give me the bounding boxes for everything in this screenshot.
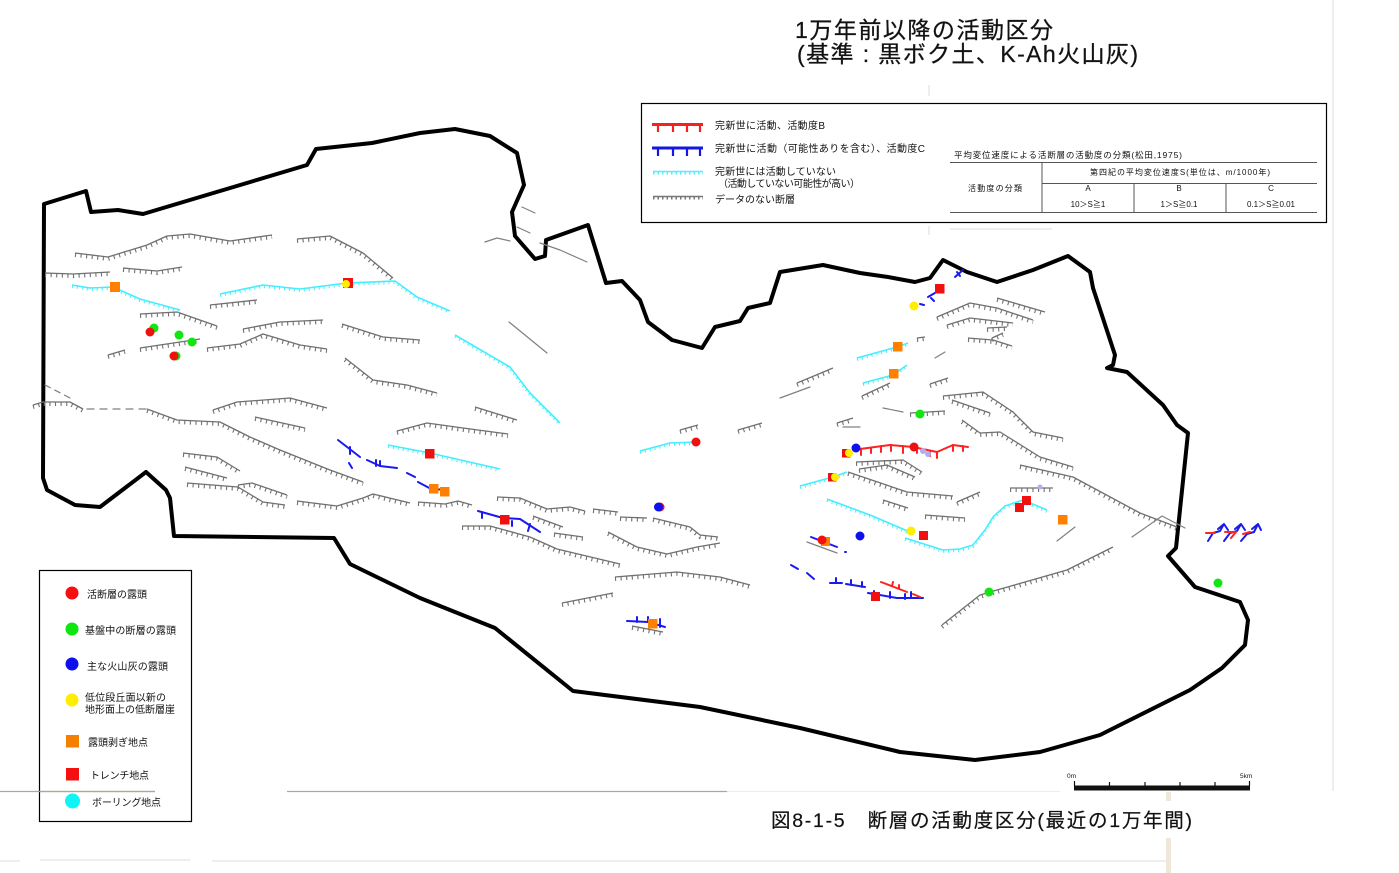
symbol: trench site: トレンチ地点 <box>90 769 149 782</box>
classification table <box>950 150 1317 212</box>
legend: survey point symbols <box>39 570 192 822</box>
legend sample: gray fault <box>653 196 703 198</box>
faults: Holocene activity, class C (blue) <box>338 270 1261 627</box>
legend sample: blue fault <box>652 148 703 156</box>
legend text: not active <box>715 165 860 190</box>
legend text: class B: 完新世に活動、活動度B <box>715 119 825 132</box>
classification table: 活動度の分類 <box>968 183 1022 193</box>
symbol: fault in bedrock: 基盤中の断層の露頭 <box>85 624 176 637</box>
title <box>795 17 1138 67</box>
symbol: boring site <box>65 794 161 809</box>
symbol: low fault scarp: 低位段丘面以新の <box>85 691 166 704</box>
scale bar: 5km <box>1240 773 1252 780</box>
classification table: 第四紀の平均変位速度S(単位は、m/1000年) <box>1090 167 1270 177</box>
classification table: 0.1＞S≧0.01 <box>1247 199 1296 209</box>
legend text: not active: （活動していない可能性が高い） <box>718 177 860 190</box>
legend: fault activity and classification table <box>642 104 1326 222</box>
legend sample: cyan fault <box>653 172 703 173</box>
symbol: low fault scarp: 地形面上の低断層崖 <box>85 703 175 716</box>
legend text: not active: 完新世には活動していない <box>715 165 836 178</box>
classification table: B <box>1176 184 1182 193</box>
symbol: boring site: ボーリング地点 <box>92 796 161 809</box>
scale bar: 0m <box>1067 773 1076 780</box>
classification table: 1＞S≧0.1 <box>1161 199 1198 209</box>
classification table: 平均変位速度による活断層の活動度の分類(松田,1975) <box>954 150 1182 160</box>
symbol: volcanic ash outcrop <box>66 658 168 673</box>
blue fault fragments east of boundary <box>1208 524 1261 541</box>
classification table: 10＞S≧1 <box>1071 199 1106 209</box>
legend sample: red fault <box>652 124 703 132</box>
classification table: A <box>1085 184 1091 193</box>
symbol: outcrop stripping site <box>66 735 148 749</box>
symbol: volcanic ash outcrop: 主な火山灰の露頭 <box>87 661 168 673</box>
scale bar <box>1067 773 1252 790</box>
faults: no data (gray) <box>33 207 1185 634</box>
symbol: active fault outcrop <box>66 586 147 601</box>
legend text: class C: 完新世に活動（可能性ありを含む）、活動度C <box>715 142 925 155</box>
symbol: trench site <box>66 768 149 782</box>
symbol: outcrop stripping site: 露頭剥ぎ地点 <box>88 736 148 749</box>
map outline: survey area boundary <box>43 129 1248 760</box>
title: 1万年前以降の活動区分 <box>795 17 1053 43</box>
legend text: no data: データのない断層 <box>715 193 795 206</box>
faults: Holocene activity, class B (red) <box>860 445 1250 597</box>
symbol: low fault scarp <box>66 691 175 716</box>
classification table: C <box>1268 184 1274 193</box>
survey point markers on map <box>110 278 1222 628</box>
title: (基準 : 黒ボク土、K-Ah火山灰) <box>797 41 1138 67</box>
faults: not active in Holocene (cyan) <box>72 281 1047 552</box>
symbol: active fault outcrop: 活断層の露頭 <box>87 589 147 601</box>
symbol: fault in bedrock <box>66 622 176 637</box>
figure caption: 図8-1-5 断層の活動度区分(最近の1万年間) <box>771 810 1192 832</box>
